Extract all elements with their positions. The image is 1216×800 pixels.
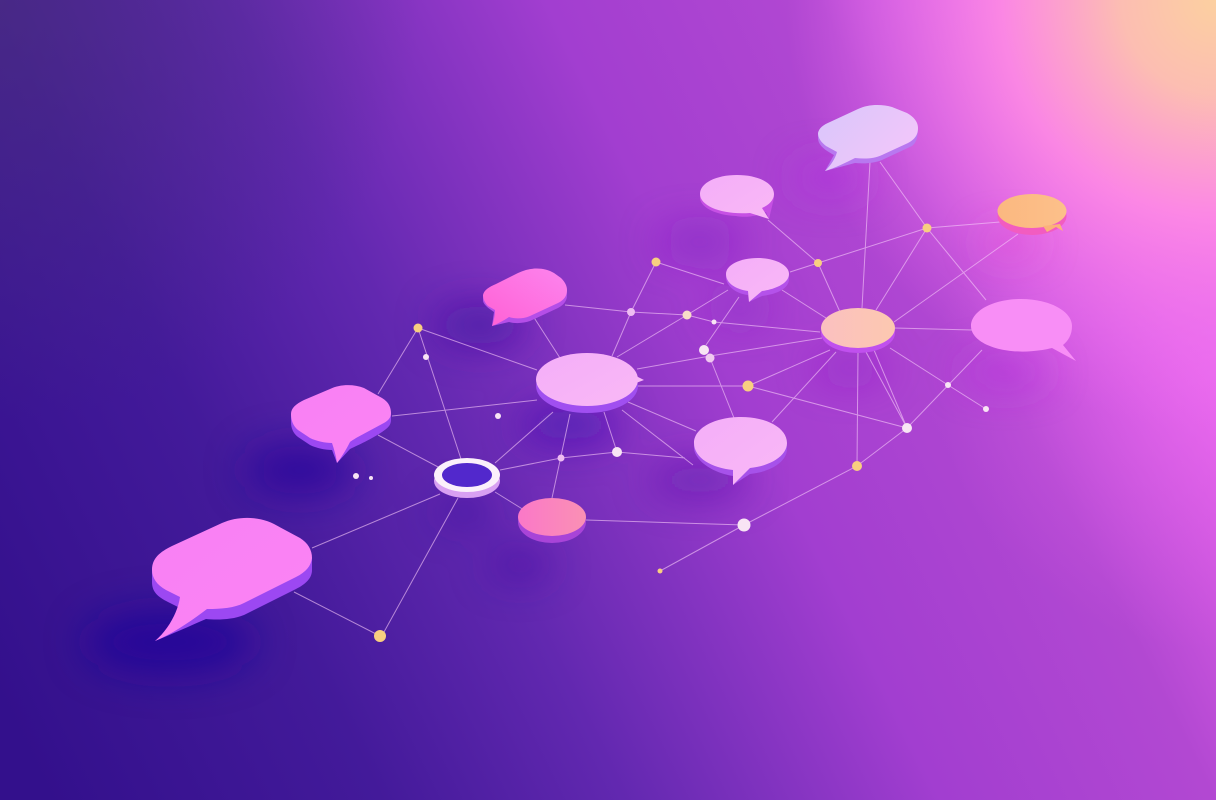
bubble: left [291, 385, 391, 463]
bubble shadows [85, 163, 1049, 674]
ring node [434, 458, 500, 498]
network nodes [353, 224, 989, 642]
bubble: large bottom left [152, 518, 312, 641]
bubble: center right [694, 417, 787, 485]
bubble: upper middle pink [483, 268, 567, 326]
bubble: orange oval [998, 194, 1066, 235]
bubble: top lavender [818, 105, 918, 171]
gold nodes [374, 224, 932, 642]
white nodes [353, 308, 989, 532]
bubble: central large [536, 353, 644, 413]
bubble: small top center [700, 175, 774, 219]
network connection lines [294, 162, 1018, 636]
bubble: small middle [726, 258, 789, 302]
bubble: peach hub [821, 308, 895, 353]
bubble: right [971, 299, 1076, 361]
bubble: coral oval [518, 498, 586, 543]
bubble tail fragment [1043, 224, 1063, 232]
